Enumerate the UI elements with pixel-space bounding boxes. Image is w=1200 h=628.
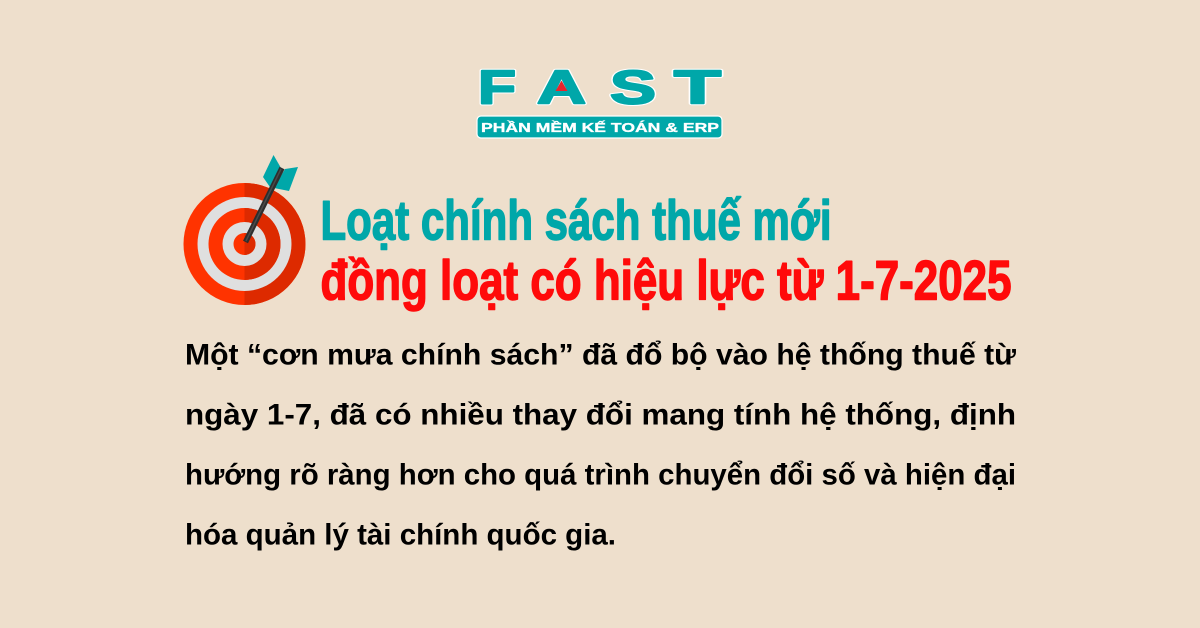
logo wordmark outline: F xyxy=(478,60,516,114)
logo wordmark: F xyxy=(478,60,516,114)
logo tagline band: PHẦN MỀM KẾ TOÁN & ERP xyxy=(481,120,719,135)
logo wordmark outline: A xyxy=(537,60,586,114)
body paragraph: Một “cơn mưa chính sách” đã đổ bộ vào hệ thống thuế từ xyxy=(185,338,1016,372)
logo wordmark outline: T xyxy=(674,60,721,114)
logo red triangle xyxy=(556,80,568,91)
logo wordmark xyxy=(478,60,721,114)
logo tagline band xyxy=(477,116,722,138)
body paragraph: hóa quản lý tài chính quốc gia. xyxy=(185,518,616,552)
body paragraph xyxy=(185,338,1016,552)
logo wordmark outline: S xyxy=(610,60,656,114)
body paragraph: hướng rõ ràng hơn cho quá trình chuyển đổi số và hiện đại xyxy=(185,458,1016,492)
heading line 2: đồng loạt có hiệu lực từ 1-7-2025 xyxy=(320,248,1012,312)
heading xyxy=(320,188,1012,312)
logo wordmark: A xyxy=(537,60,586,114)
heading line 1: Loạt chính sách thuế mới xyxy=(320,188,832,252)
logo wordmark: T xyxy=(674,60,721,114)
body paragraph: ngày 1-7, đã có nhiều thay đổi mang tính hệ thống, định xyxy=(185,398,1016,432)
logo: FAST xyxy=(477,60,722,138)
logo wordmark: S xyxy=(610,60,656,114)
icon: target with arrow xyxy=(184,155,306,305)
logo wordmark outline xyxy=(478,60,721,114)
